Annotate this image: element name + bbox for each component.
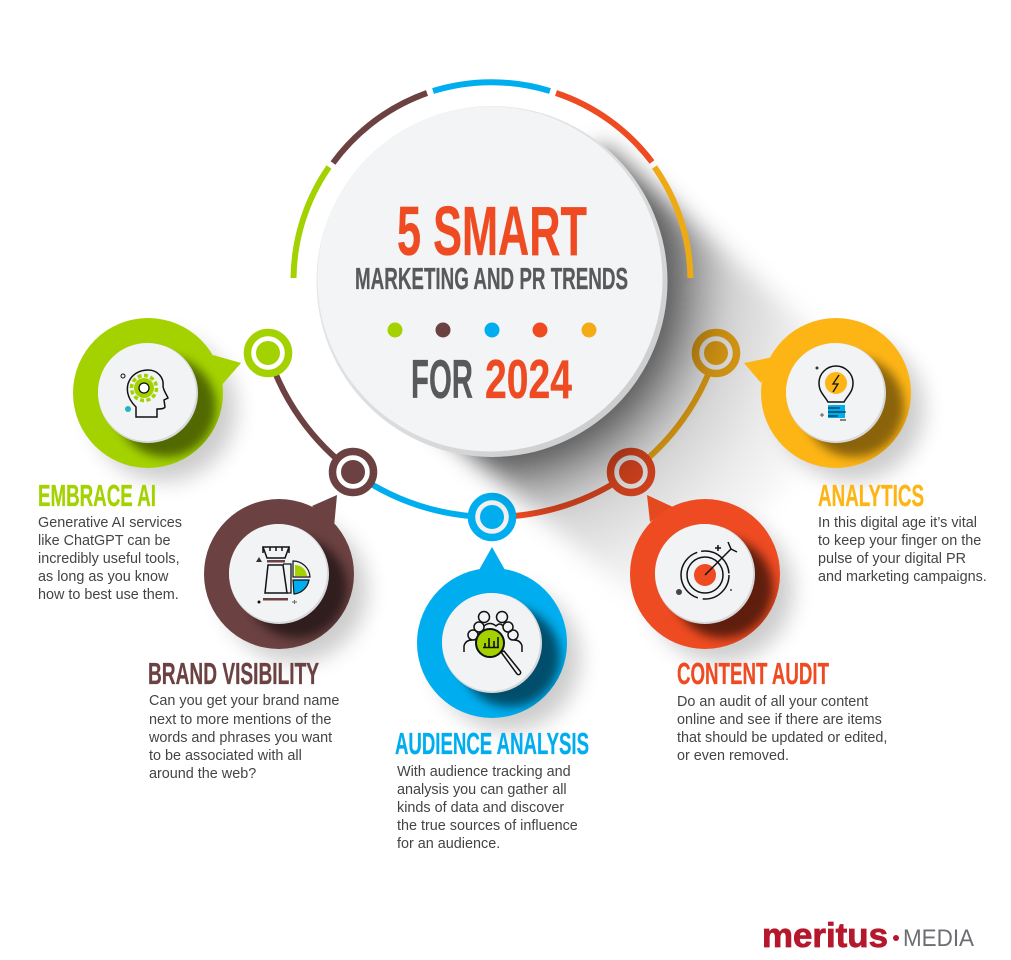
bubble	[312, 495, 337, 527]
text block	[148, 693, 339, 782]
text block: like ChatGPT can be	[38, 533, 171, 549]
heading: AUDIENCE ANALYSIS	[395, 726, 589, 761]
text block	[818, 515, 987, 585]
text block: and marketing campaigns.	[818, 569, 987, 585]
text block: pulse of your digital PR	[818, 551, 966, 567]
dots	[388, 322, 596, 338]
text block: kinds of data and discover	[397, 800, 564, 816]
text block	[38, 515, 182, 603]
logo: MEDIA	[903, 925, 974, 952]
text block: next to more mentions of the	[149, 712, 331, 728]
icon: light bulb	[816, 366, 853, 420]
text block	[397, 764, 578, 852]
text block: that should be updated or edited,	[677, 730, 887, 746]
panel: audience analysis	[395, 547, 589, 852]
icon: head with gear	[121, 370, 168, 417]
panel: content audit	[630, 495, 887, 764]
text block: Can you get your brand name	[149, 693, 339, 709]
bubble	[744, 357, 773, 383]
bubble	[213, 355, 241, 387]
outer segmented arc	[294, 82, 690, 278]
heading: BRAND VISIBILITY	[148, 656, 319, 691]
text block: how to best use them.	[38, 587, 179, 603]
title: for 2024: 2024	[485, 348, 572, 410]
logo: meritus	[762, 917, 888, 955]
bubble	[647, 495, 673, 522]
text block: In this digital age it’s vital	[818, 515, 977, 531]
text block: around the web?	[149, 766, 256, 782]
text block: analysis you can gather all	[397, 782, 567, 798]
text block: or even removed.	[677, 748, 789, 764]
subtitle: MARKETING AND PR TRENDS	[355, 261, 628, 296]
main title disc	[316, 106, 668, 457]
icon: chess rook and pie	[256, 547, 310, 604]
text block: to be associated with all	[149, 748, 302, 764]
text block: Generative AI services	[38, 515, 182, 531]
text block: for an audience.	[397, 836, 500, 852]
text block: With audience tracking and	[397, 764, 571, 780]
title: 5 smart: 5 SMART	[397, 192, 587, 270]
connector arc and nodes	[248, 332, 736, 538]
text block: words and phrases you want	[148, 730, 332, 746]
icon: audience and magnifier	[464, 612, 522, 675]
text block: as long as you know	[38, 569, 169, 585]
text block: incredibly useful tools,	[38, 551, 180, 567]
main circle cast shadow	[497, 265, 770, 504]
icon: target with arrow	[676, 542, 737, 599]
panel: brand visibility	[148, 495, 367, 782]
text block: Do an audit of all your content	[677, 694, 868, 710]
heading: EMBRACE AI	[38, 478, 156, 513]
logo	[762, 917, 974, 955]
panel: analytics	[744, 318, 987, 585]
bubble	[479, 547, 505, 570]
panel: embrace ai	[38, 318, 241, 603]
text block	[677, 694, 887, 764]
title: for 2024: FOR	[411, 348, 473, 410]
heading: CONTENT AUDIT	[677, 656, 829, 691]
heading: ANALYTICS	[818, 478, 924, 513]
text block: online and see if there are items	[677, 712, 882, 728]
text block: to keep your finger on the	[818, 533, 981, 549]
text block: the true sources of influence	[397, 818, 578, 834]
